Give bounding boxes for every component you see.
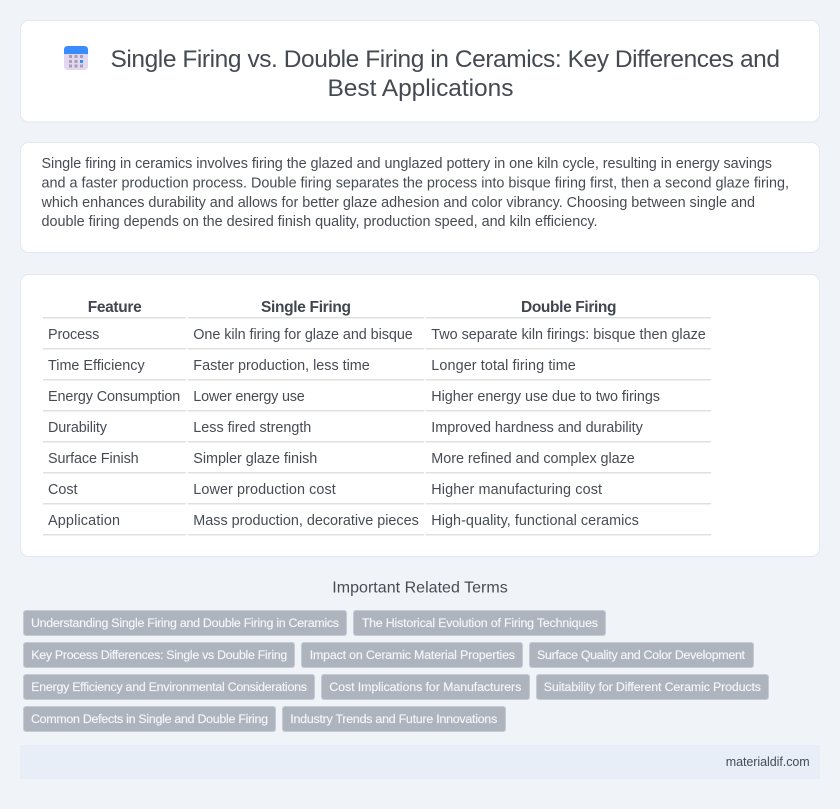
- chip: Key Process Differences: Single vs Double Firing: [31, 648, 287, 662]
- footer source: materialdif.com: [726, 755, 810, 769]
- chip: Impact on Ceramic Material Properties: [310, 648, 515, 662]
- table header row: [88, 299, 616, 316]
- chip: Suitability for Different Ceramic Products: [544, 680, 761, 694]
- table row: time efficiency: [48, 358, 576, 374]
- table row: energy consumption: Higher energy use due to two firings: [431, 389, 660, 405]
- table row: surface finish: More refined and complex glaze: [431, 451, 635, 467]
- chip: [24, 610, 346, 636]
- chip: Energy Efficiency and Environmental Considerations: [31, 680, 307, 694]
- intro paragraph: double firing depends on the desired finish quality, production speed, and kiln efficiency.: [42, 214, 598, 230]
- chip: [24, 642, 294, 668]
- table row: energy consumption: Lower energy use: [193, 389, 305, 405]
- chip: [282, 706, 506, 732]
- title: [110, 46, 780, 102]
- intro paragraph: [40, 156, 789, 230]
- table row: energy consumption: Energy Consumption: [48, 389, 180, 405]
- table row: surface finish: [48, 451, 635, 467]
- table row: durability: Durability: [48, 420, 108, 436]
- title: Best Applications: [328, 75, 514, 102]
- chip: Cost Implications for Manufacturers: [329, 680, 521, 694]
- table row: time efficiency: Longer total firing time: [431, 358, 576, 374]
- table header row: Single Firing: [261, 299, 351, 316]
- chip: [354, 610, 606, 636]
- title: Single Firing vs. Double Firing in Ceramics: Key Differences and: [110, 46, 780, 73]
- table header row: Double Firing: [521, 299, 616, 316]
- chip: Understanding Single Firing and Double Firing in Ceramics: [31, 616, 339, 630]
- chip: [530, 642, 754, 668]
- table row: cost: Lower production cost: [193, 482, 336, 498]
- table row: application: Mass production, decorative pieces: [193, 513, 419, 529]
- chip: [24, 706, 276, 732]
- chip: Common Defects in Single and Double Firing: [31, 712, 268, 726]
- table row: durability: Improved hardness and durability: [431, 420, 644, 436]
- chip: Surface Quality and Color Development: [537, 648, 746, 662]
- icon: calendar: [64, 46, 88, 70]
- table row: process: Process: [48, 327, 99, 343]
- table row: process: [48, 327, 706, 343]
- table row: surface finish: Surface Finish: [48, 451, 139, 467]
- header panel: [20, 20, 820, 122]
- table row: process: Two separate kiln firings: bisque then glaze: [431, 327, 706, 343]
- table row: time efficiency: Faster production, less time: [193, 358, 370, 374]
- comparison table panel: [20, 274, 820, 556]
- related terms heading: Important Related Terms: [332, 580, 508, 597]
- table row: cost: Cost: [48, 482, 78, 498]
- intro paragraph: which enhances durability and allows for better glaze adhesion and color vibrancy. Choosing between single and: [40, 195, 755, 211]
- chip: [24, 674, 314, 700]
- table row rules: [43, 317, 711, 536]
- table row: time efficiency: Time Efficiency: [48, 358, 145, 374]
- related terms chips: [24, 610, 768, 732]
- intro text panel: [20, 142, 820, 252]
- table row: application: [48, 513, 639, 529]
- chip: Industry Trends and Future Innovations: [290, 712, 497, 726]
- table row: energy consumption: [48, 389, 660, 405]
- chip: The Historical Evolution of Firing Techniques: [362, 616, 598, 630]
- chip: [536, 674, 768, 700]
- intro paragraph: Single firing in ceramics involves firing the glazed and unglazed pottery in one kiln cycle, resulting in energy savings: [42, 156, 772, 172]
- footer bar: [20, 745, 820, 779]
- table row: process: One kiln firing for glaze and bisque: [193, 327, 413, 343]
- intro paragraph: and a faster production process. Double firing separates the process into bisque firing first, then a second glaze firing,: [42, 176, 789, 192]
- table row: cost: [48, 482, 602, 498]
- table row: application: Application: [48, 513, 120, 529]
- chip: [322, 674, 530, 700]
- table row: application: High-quality, functional ceramics: [431, 513, 639, 529]
- table row: durability: Less fired strength: [193, 420, 311, 436]
- chip: [302, 642, 522, 668]
- table row: surface finish: Simpler glaze finish: [193, 451, 317, 467]
- table header row: Feature: [88, 299, 142, 316]
- table row: durability: [48, 420, 644, 436]
- table row: cost: Higher manufacturing cost: [431, 482, 602, 498]
